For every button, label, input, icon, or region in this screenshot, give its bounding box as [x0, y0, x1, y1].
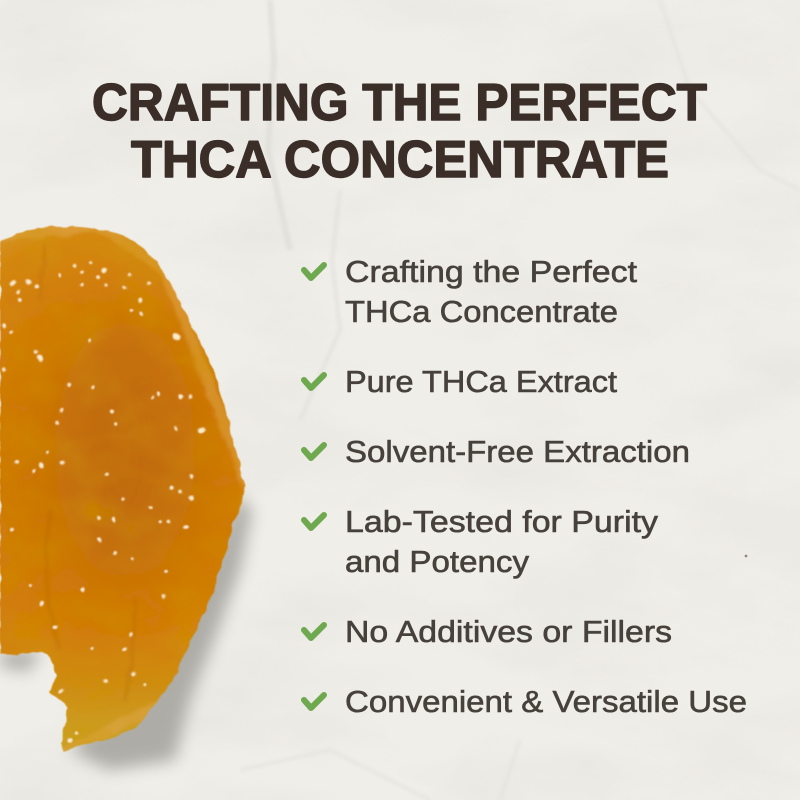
item: No Additives or Fillers: No Additives or Fillers: [345, 614, 672, 649]
item: Crafting the Perfect THCa Concentrate: THCa Concentrate: [345, 294, 618, 329]
item: Lab-Tested for Purity and Potency: Lab-Tested for Purity: [345, 504, 659, 539]
sparkles on wax: [2, 260, 204, 743]
concentrate blob shadow: [0, 495, 252, 770]
item: Convenient & Versatile Use: Convenient & Versatile Use: [345, 684, 747, 719]
item: Pure THCa Extract: Pure THCa Extract: [345, 364, 617, 399]
item: Lab-Tested for Purity and Potency: and Potency: [345, 544, 530, 579]
checklist: [304, 254, 747, 719]
title: [92, 74, 707, 189]
item: Crafting the Perfect THCa Concentrate: Crafting the Perfect: [345, 254, 637, 289]
THCa concentrate wax blob: [0, 220, 250, 760]
item: Crafting the Perfect THCa Concentrate: [304, 254, 637, 329]
item: Lab-Tested for Purity and Potency: [304, 504, 659, 579]
item: Solvent-Free Extraction: Solvent-Free Extraction: [345, 434, 690, 469]
title: CRAFTING THE PERFECT: [92, 74, 707, 132]
title: THCA CONCENTRATE: [131, 131, 669, 189]
